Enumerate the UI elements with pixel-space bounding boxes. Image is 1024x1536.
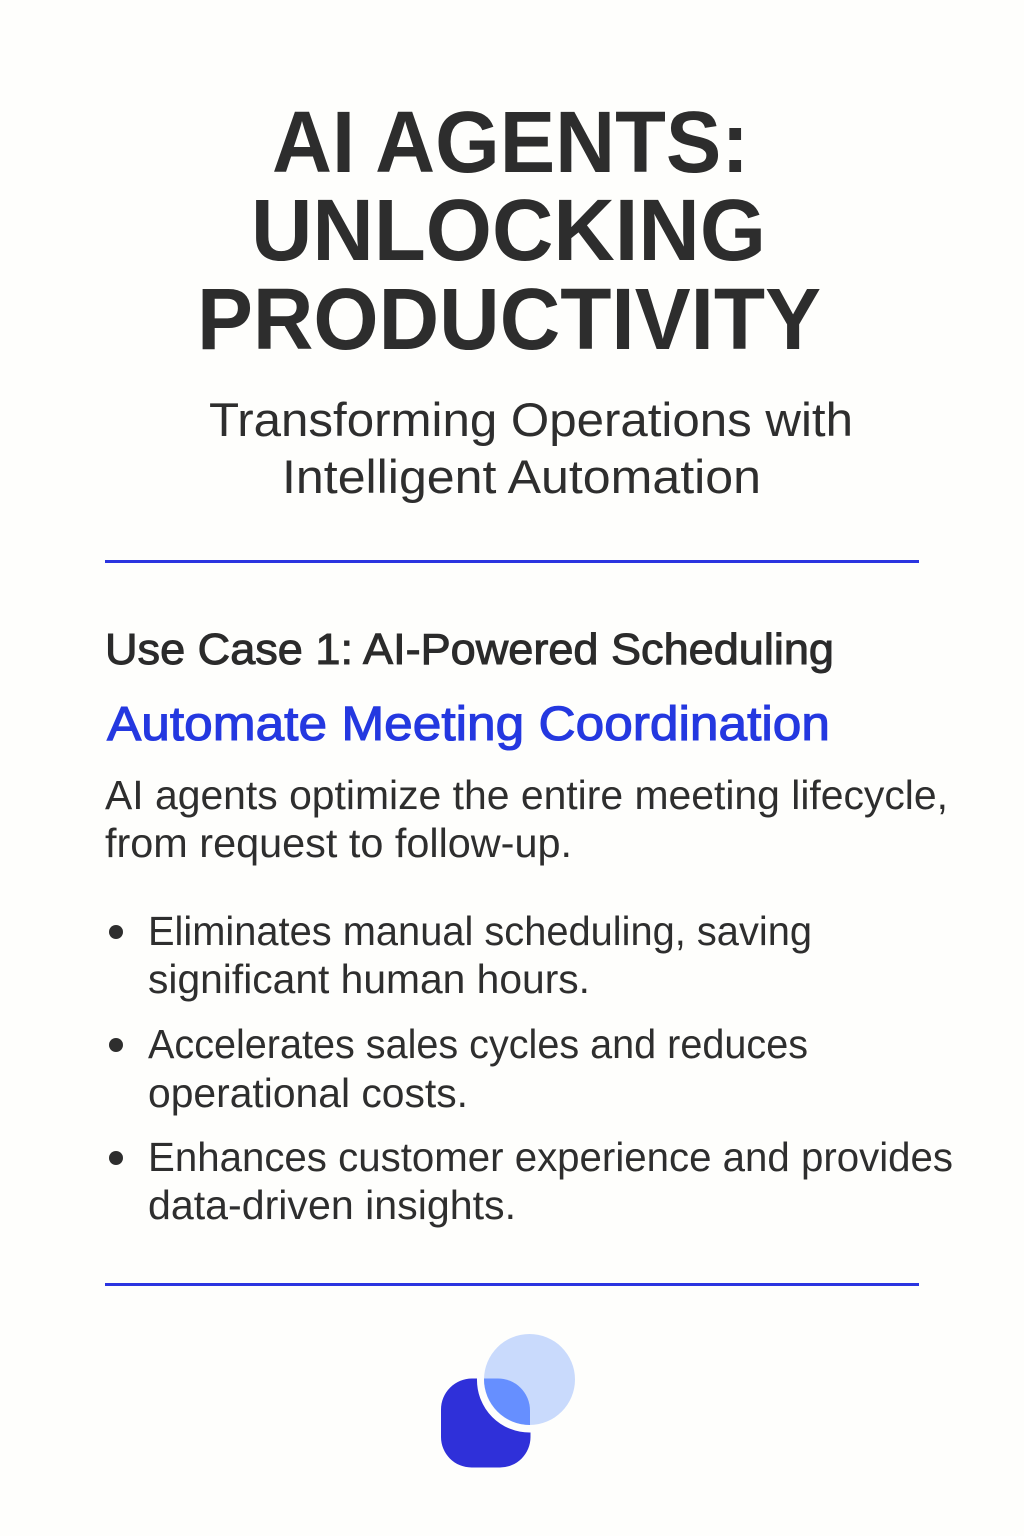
bullet 1 [109,908,812,1002]
subtitle [209,393,853,503]
subtitle: Intelligent Automation [282,450,761,503]
title [197,94,821,368]
subtitle: Transforming Operations with [209,393,853,446]
bullet 3: Enhances customer experience and provides [148,1134,953,1180]
subheading: automate meeting coordination: Automate Meeting Coordination [107,698,830,751]
bullet 1: Eliminates manual scheduling, saving [148,908,812,954]
intro text [105,772,948,866]
title: UNLOCKING [251,182,766,279]
bullet 2 [109,1021,808,1116]
bullet 3 [109,1134,953,1228]
bullet 2: operational costs. [148,1070,468,1116]
bullet 2: Accelerates sales cycles and reduces [148,1021,808,1067]
bullet list [109,908,953,1228]
title: AI AGENTS: [272,94,749,191]
intro text: AI agents optimize the entire meeting lifecycle, [105,772,948,818]
intro text: from request to follow-up. [105,820,572,866]
heading: use case: Use Case 1: AI-Powered Scheduling [105,625,834,674]
bullet 3: data-driven insights. [148,1182,516,1228]
title: PRODUCTIVITY [197,271,821,368]
bullet 1: significant human hours. [148,956,590,1002]
icon: logo [441,1334,575,1468]
